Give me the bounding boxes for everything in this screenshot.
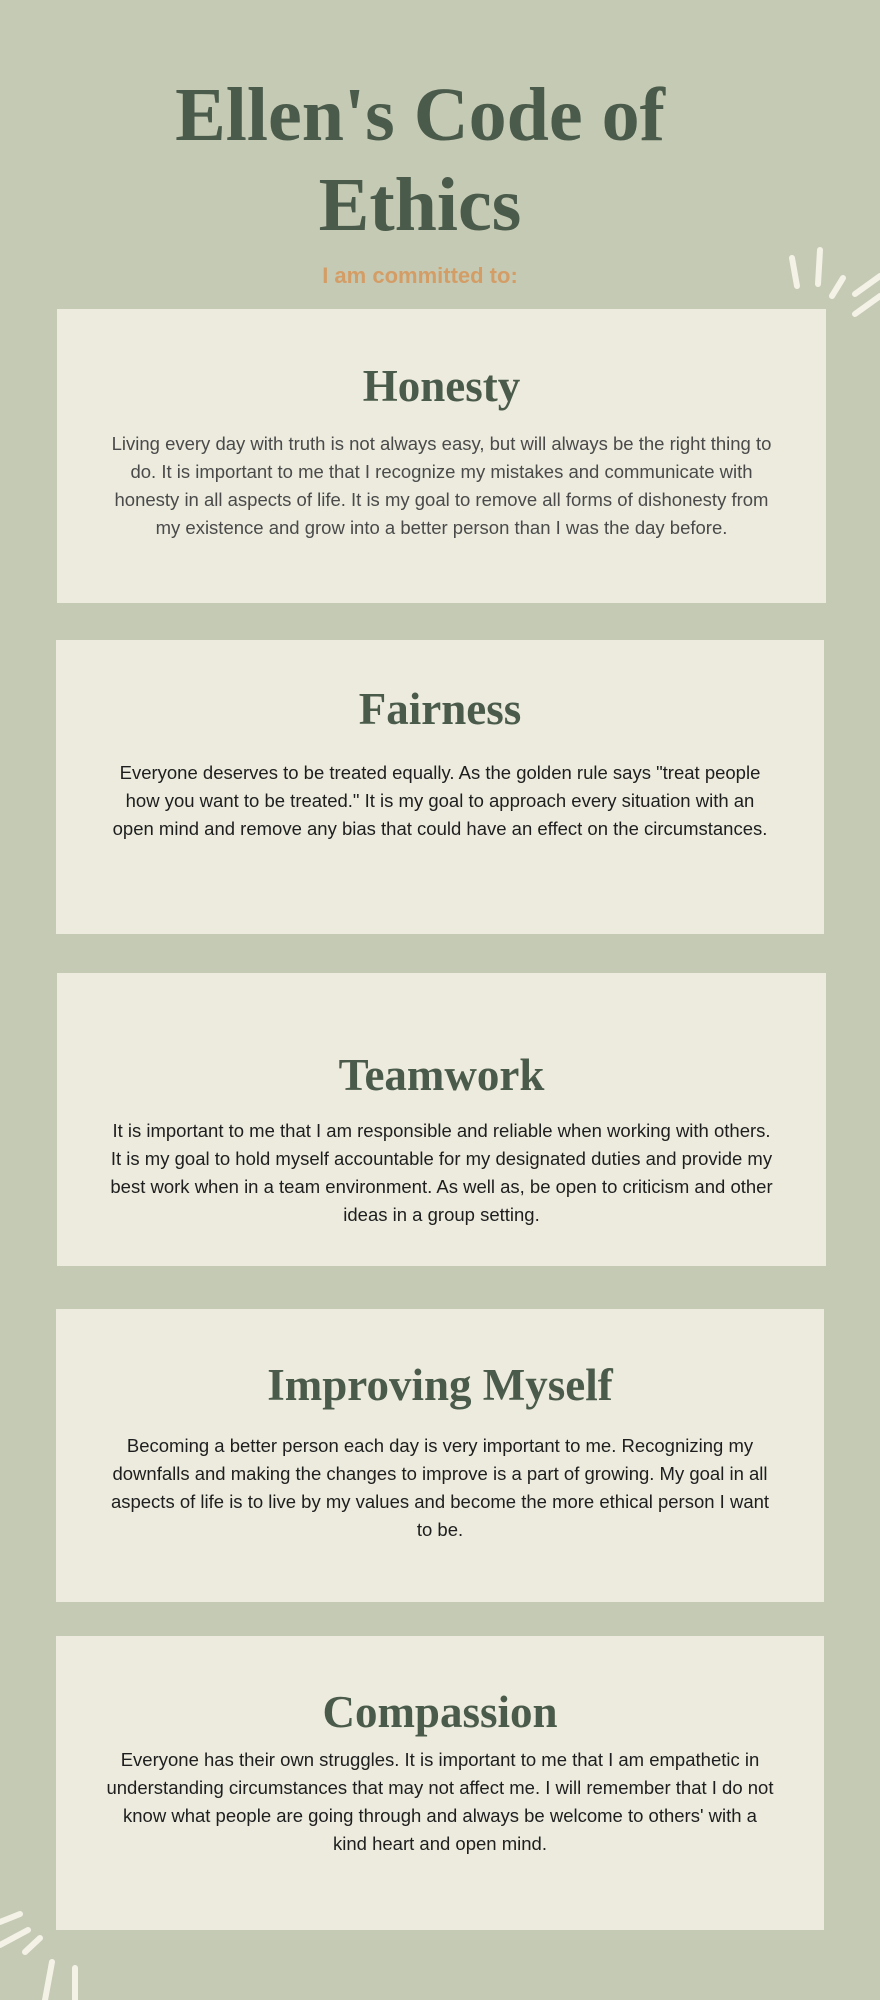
- title: Ellen's Code of: [175, 73, 665, 157]
- panel: honesty: [57, 309, 826, 603]
- decoration: bottom-left strokes: [0, 1911, 78, 2000]
- heading: honesty: Honesty: [363, 361, 520, 411]
- decoration: top-right strokes: [789, 247, 880, 317]
- heading: improving myself: Improving Myself: [267, 1360, 613, 1410]
- subtitle: I am committed to:: [322, 263, 518, 288]
- text: honesty: Living every day with truth is not always easy, but will always be the right thing to do. It is important to me that I recognize my mistakes and communicate with honesty in all aspects of life. It is my goal to remove all forms of dishonesty from my existence and grow into a better person than I was the day before.: [112, 433, 771, 538]
- title: [175, 73, 666, 247]
- panel: teamwork: [57, 973, 826, 1266]
- text: fairness: Everyone deserves to be treated equally. As the golden rule says "treat people how you want to be treated." It is my goal to approach every situation with an open mind and remove any bias that could have an effect on the circumstances.: [113, 762, 767, 839]
- text: improving myself: Becoming a better person each day is very important to me. Recognizing my downfalls and making the changes to improve is a part of growing. My goal in all aspects of life is to live by my values and become the more ethical person I want to be.: [111, 1435, 769, 1540]
- text: teamwork: It is important to me that I am responsible and reliable when working with others. It is my goal to hold myself accountable for my designated duties and provide my best work when in a team environment. As well as, be open to criticism and other ideas in a group setting.: [110, 1120, 773, 1225]
- title: Ethics: [319, 163, 521, 247]
- heading: fairness: Fairness: [359, 684, 521, 734]
- heading: teamwork: Teamwork: [339, 1050, 544, 1100]
- panel: improving myself: [56, 1309, 824, 1602]
- panel: fairness: [56, 640, 824, 934]
- heading: compassion: Compassion: [322, 1687, 558, 1737]
- text: compassion: Everyone has their own struggles. It is important to me that I am empathetic in understanding circumstances that may not affect me. I will remember that I do not know what people are going through and always be welcome to others' with a kind heart and open mind.: [106, 1749, 774, 1854]
- panel: compassion: [56, 1636, 824, 1930]
